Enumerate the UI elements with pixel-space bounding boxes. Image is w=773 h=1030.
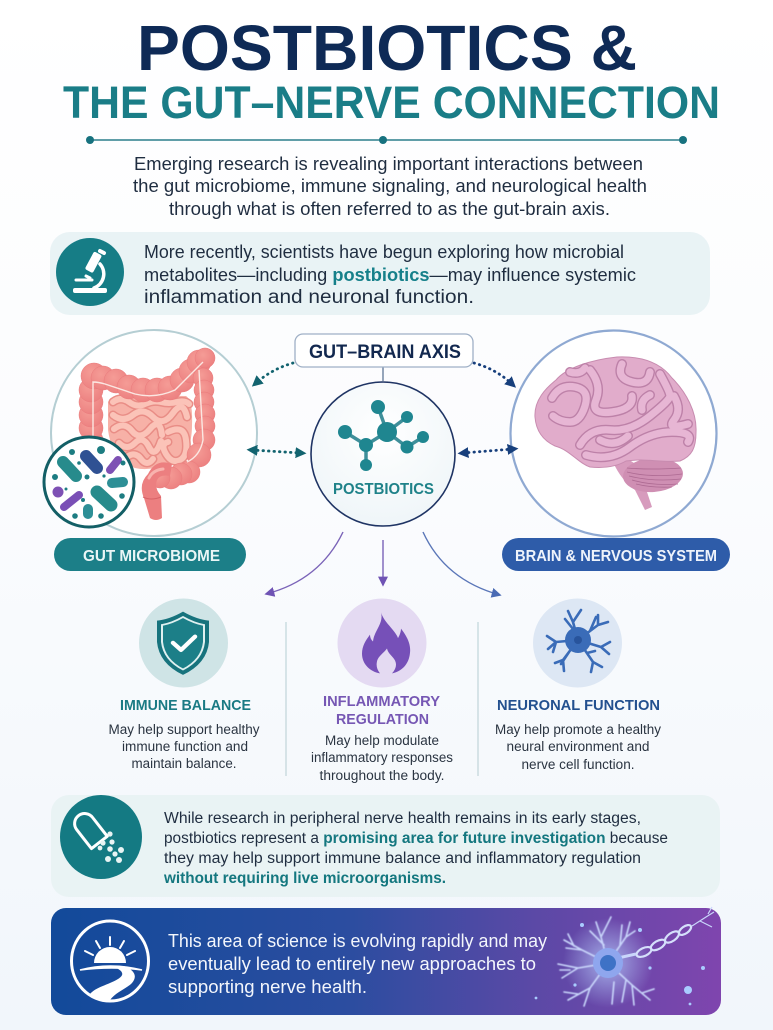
column: inflammatory regulation: REGULATION (336, 711, 429, 728)
brain circle (510, 330, 716, 536)
gut circle (44, 330, 257, 536)
icon: microscope (56, 238, 124, 306)
arrow: to immune balance (266, 532, 343, 594)
panel text: While research in peripheral nerve health remains in its early stages, (164, 810, 641, 827)
icon: sunrise and road (72, 921, 148, 1001)
inset: microbes (44, 437, 134, 527)
arrow: to neuronal function (423, 532, 500, 595)
column: immune balance (108, 598, 260, 771)
column: immune balance: immune function and (122, 739, 248, 754)
column: immune balance: May help support healthy (108, 722, 260, 737)
icon: molecule (338, 400, 429, 471)
title: POSTBIOTICS & (137, 12, 637, 84)
icon: neuron (547, 610, 610, 672)
panel text: postbiotics represent a promising area for future investigation because (164, 830, 668, 847)
gut-brain axis label: GUT–BRAIN AXIS (309, 342, 461, 363)
icon: shield (157, 612, 209, 675)
label: brain and nervous system (502, 538, 730, 571)
panel text: inflammation and neuronal function. (144, 287, 474, 308)
gut-brain axis label (295, 334, 473, 381)
panel: future investigation (51, 795, 720, 897)
icon: large intestine (79, 348, 215, 489)
column: immune balance: maintain balance. (132, 756, 236, 771)
column: neuronal function (495, 598, 661, 772)
panel: recent research (50, 232, 710, 315)
label: gut microbiome (54, 538, 246, 571)
panel text: More recently, scientists have begun exploring how microbial (144, 242, 624, 262)
title divider (86, 136, 687, 144)
postbiotics circle (311, 382, 455, 526)
arrow: axis to gut (256, 363, 293, 383)
icon: capsule (60, 795, 142, 879)
column: neuronal function: NEURONAL FUNCTION (497, 697, 660, 714)
label: brain and nervous system: BRAIN & NERVOUS SYSTEM (515, 548, 717, 565)
panel text: metabolites—including postbiotics—may influence systemic (144, 265, 636, 285)
postbiotics circle: POSTBIOTICS (333, 481, 434, 498)
column: neuronal function: May help promote a healthy (495, 722, 661, 737)
banner text: eventually lead to entirely new approaches to (168, 953, 536, 974)
panel text: without requiring live microorganisms. (163, 870, 446, 887)
banner text (168, 930, 548, 997)
arrow: axis to brain (474, 363, 512, 384)
icon: small intestine (108, 395, 192, 469)
title: THE GUT–NERVE CONNECTION (63, 77, 720, 128)
banner text: This area of science is evolving rapidly and may (168, 930, 548, 951)
column: inflammatory regulation (311, 598, 453, 783)
arrow: gut to postbiotics (252, 450, 301, 453)
title (63, 12, 720, 128)
label: gut microbiome: GUT MICROBIOME (83, 548, 220, 565)
icon: brain stem and cerebellum (613, 456, 684, 510)
intro text: through what is often referred to as the gut-brain axis. (169, 199, 610, 219)
icon: flame (362, 612, 410, 673)
intro text (133, 154, 647, 219)
panel text (163, 810, 668, 887)
column: inflammatory regulation: throughout the body. (320, 768, 444, 783)
intro text: Emerging research is revealing important interactions between (134, 154, 643, 174)
panel: outlook banner (51, 907, 721, 1015)
banner text: supporting nerve health. (168, 976, 367, 997)
icon: brain (535, 357, 696, 467)
column: immune balance: IMMUNE BALANCE (120, 697, 251, 714)
column: inflammatory regulation: inflammatory responses (311, 750, 453, 765)
intro text: the gut microbiome, immune signaling, and neurological health (133, 176, 647, 196)
column: inflammatory regulation: May help modulate (325, 733, 439, 748)
panel text: they may help support immune balance and inflammatory regulation (164, 850, 641, 867)
icon: rectum (142, 462, 172, 520)
column: inflammatory regulation: INFLAMMATORY (323, 693, 440, 710)
column: neuronal function: neural environment and (506, 739, 650, 754)
arrow: to inflammatory regulation (382, 540, 384, 585)
panel text (144, 242, 636, 308)
illustration: glowing neuron (535, 907, 714, 1008)
arrow: postbiotics to brain (463, 449, 513, 453)
column: neuronal function: nerve cell function. (522, 757, 634, 772)
